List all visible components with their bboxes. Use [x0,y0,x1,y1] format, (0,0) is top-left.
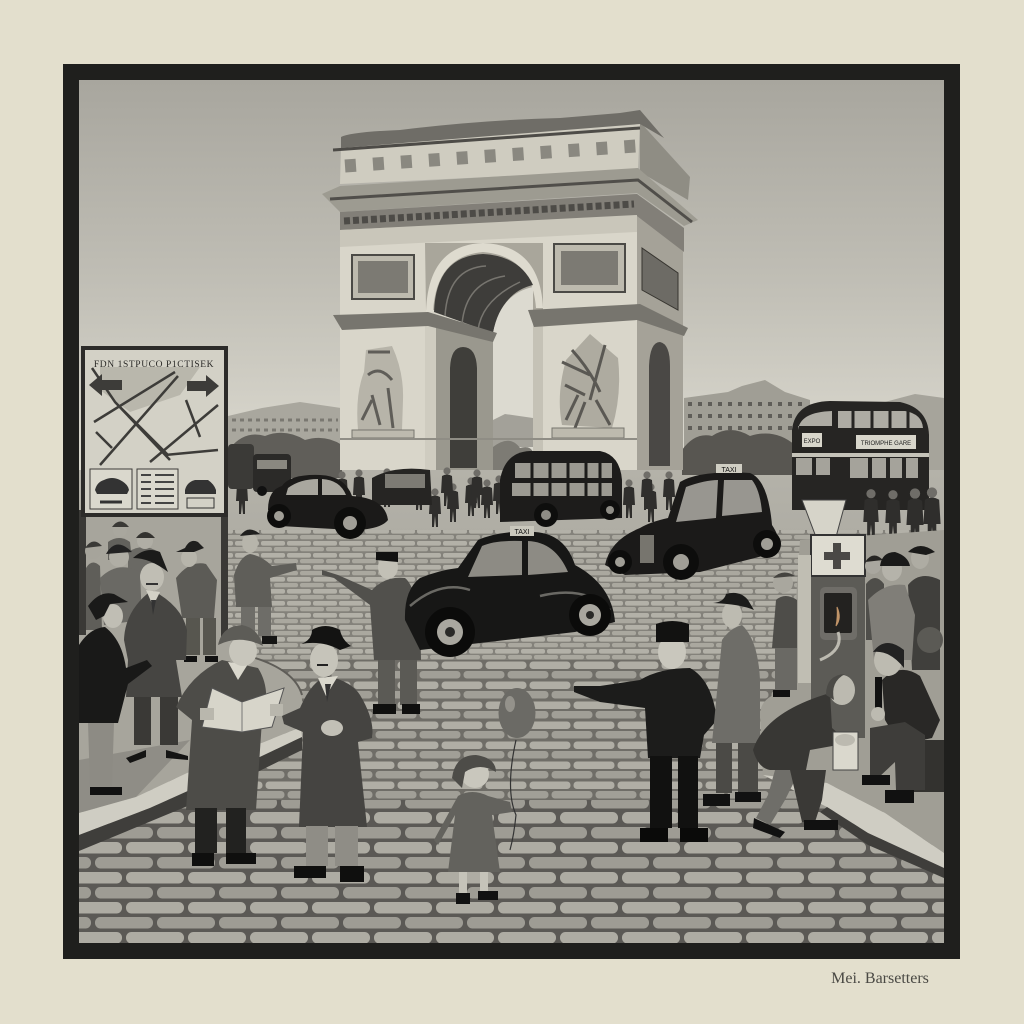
head [461,760,489,788]
man bending [753,674,858,838]
center bus [500,451,622,527]
object in hand [875,677,882,710]
building right [684,380,810,450]
hand [321,720,343,736]
man in hat beside map reader [282,626,372,882]
arch vault [434,254,533,333]
man far left [85,541,102,630]
wheels [534,503,558,527]
policeman pointing [574,621,717,842]
double decker bus [792,401,929,510]
legs [195,808,246,853]
cobbles near [79,800,944,943]
frieze [340,194,684,252]
picture frame [63,64,960,959]
left impost band [333,312,497,342]
head [310,643,338,677]
windows [468,541,568,577]
arch spandrel [425,243,543,310]
windows [512,463,612,496]
statue group right [560,334,619,428]
distant crowd [236,467,675,527]
pump body [811,575,865,738]
building left windows [232,420,338,430]
right taxi [605,464,781,580]
rear leg [790,770,826,822]
sidewalk [760,530,944,853]
jacket [882,670,940,745]
map fold [241,702,243,732]
head [773,573,793,593]
tie [325,684,331,702]
legs [775,648,797,690]
legs [459,872,488,893]
sky [79,80,944,480]
entablature band [340,215,637,247]
shoes [773,690,790,697]
shoes [456,891,498,904]
building far right [885,394,944,470]
kepi [656,621,689,642]
hair [873,643,904,668]
jacket [772,596,797,648]
shoes [373,704,420,714]
map arrow left [89,374,122,396]
left pier highlight [425,326,436,470]
curb side [820,807,944,878]
coat [753,693,840,770]
pump sign panel [811,535,865,576]
gauge [824,593,852,633]
bag [917,627,943,653]
map [202,688,284,732]
hands [200,704,283,720]
bus advert: TRIOMPHE GARE [861,441,911,447]
sidewalk inner curve [252,657,302,695]
legs [378,660,417,705]
shoes [294,866,364,882]
cross [824,543,850,569]
text panel [137,469,178,509]
child [434,755,512,904]
curb top [79,727,302,835]
right small arch [649,342,670,466]
curb top [763,775,944,868]
head [378,555,398,579]
left car [267,475,388,539]
flame [836,607,839,626]
hat [218,625,263,646]
trousers [756,770,800,825]
box [833,732,858,770]
petrol pump [798,535,865,738]
building left [228,402,341,470]
main front face [340,232,637,470]
wheels [334,507,366,539]
head [874,644,902,676]
relief left [352,255,414,299]
bus upper windows [798,411,923,430]
collar [318,676,338,696]
sign board [83,348,226,515]
signature: Mei. Barsetters [831,970,929,987]
tall man in coat [124,550,188,763]
string [510,740,516,850]
man at pump side [772,572,797,697]
left curb and sidewalk [79,515,302,851]
statue plinth left [352,430,414,438]
man with grey coat [176,541,218,662]
fender highlight [410,587,610,610]
collar [228,662,248,680]
sign pole left [79,510,86,635]
coat [712,625,760,743]
sidewalk shadow [79,740,190,813]
trees left [230,433,342,478]
cap [376,552,398,562]
side relief [642,248,678,310]
side column [798,555,811,683]
man with hat pointing [234,529,297,644]
right group [862,546,944,803]
seated man [862,643,944,803]
legs [870,722,925,790]
left group of men [79,522,297,795]
head [658,635,686,669]
arch surround [426,243,543,312]
right impost band [528,304,688,336]
uniform and arm [574,668,717,758]
attic rubble top [341,110,664,148]
sign pole right [221,510,228,640]
coat and arm [322,570,421,660]
right pier inner [533,322,637,470]
left pier inner wall [428,326,493,470]
far man [865,555,884,640]
head [722,602,742,628]
bus body [792,401,929,510]
arch base line [340,438,637,440]
windows [286,479,346,495]
arch vault coffers [445,266,520,330]
building seen through arch [493,414,533,447]
hair [773,572,795,578]
trees right [682,430,795,475]
statue plinth right [552,428,624,438]
main cornice [322,168,698,226]
sidewalk [79,515,302,813]
legs [716,743,758,793]
body [268,475,388,530]
view through arch [493,287,533,470]
taxi sign: TAXI [514,529,530,536]
map streets [92,368,218,465]
grille [640,535,654,563]
legs [306,826,358,866]
window dividers [532,463,600,496]
cobbles middle [79,660,944,800]
tree seen through arch [493,441,533,470]
car panel right [185,480,216,508]
bus route sign: EXPO [804,439,821,445]
hat [301,626,351,650]
windows [676,480,762,522]
dress [434,792,512,872]
ground [79,470,944,943]
far back man one [108,522,132,560]
mustache [317,664,328,666]
crate [912,740,944,792]
bus lower windows [796,458,918,478]
attic front [340,122,640,184]
taxi sign [510,526,534,536]
frieze detail [344,204,634,221]
attic cornice line [333,128,640,150]
right curb and sidewalk [760,530,944,878]
taxi sign: TAXI [721,467,737,474]
balloon [498,688,536,850]
hand [871,707,885,721]
map arrow right [187,375,219,397]
far back man two [128,532,160,575]
body [605,472,779,575]
hair [826,674,845,700]
front wheel [425,607,475,657]
shoes [753,818,838,838]
building right windows [688,404,806,428]
people near bus [863,487,941,544]
hair [452,755,496,788]
sign title: FDN 1STPUCO P1CTISEK [94,360,214,370]
man in black jacket [79,593,152,795]
man in long coat [703,593,761,806]
body [405,532,615,650]
taxi sign [716,464,742,474]
picture area [79,80,944,943]
relief right [554,244,625,292]
left small arch [450,347,477,468]
officer in centre [322,552,421,714]
cobbles far [79,530,944,660]
hose [820,632,839,660]
curb side [79,737,302,851]
hand [835,734,855,746]
balloon shine [505,696,515,712]
pump funnel [802,500,846,537]
shoes [192,853,256,866]
left background car [372,469,432,505]
coat [176,660,266,810]
background buildings [228,380,944,478]
dark man right [908,546,940,670]
coat [282,676,372,827]
statue group left [357,346,403,430]
attic discs [345,146,636,166]
shoes [862,775,914,803]
right pier highlight [533,322,543,470]
shoes [640,828,708,842]
small far buses left [228,444,291,496]
car panel left [90,469,132,509]
rear wheel [569,594,611,636]
head [229,636,257,666]
centre taxi [405,526,615,657]
man with open map [176,625,284,866]
Arc de Triomphe [322,110,698,470]
trousers [650,756,698,828]
gauge surround [820,587,857,640]
man behind with scarf [100,544,142,625]
head [829,675,855,705]
balloon shape [498,688,536,738]
bus upper dividers [853,411,908,428]
man grey coat [868,552,915,660]
attic side [640,122,690,200]
right side wall [637,215,683,470]
bus middle strip [792,453,929,457]
body [500,451,622,522]
cornice shadow [330,180,692,222]
street map sign [79,348,228,640]
wheels [663,544,699,580]
shoes [703,792,761,806]
hat [713,593,754,610]
map tint [100,367,200,412]
